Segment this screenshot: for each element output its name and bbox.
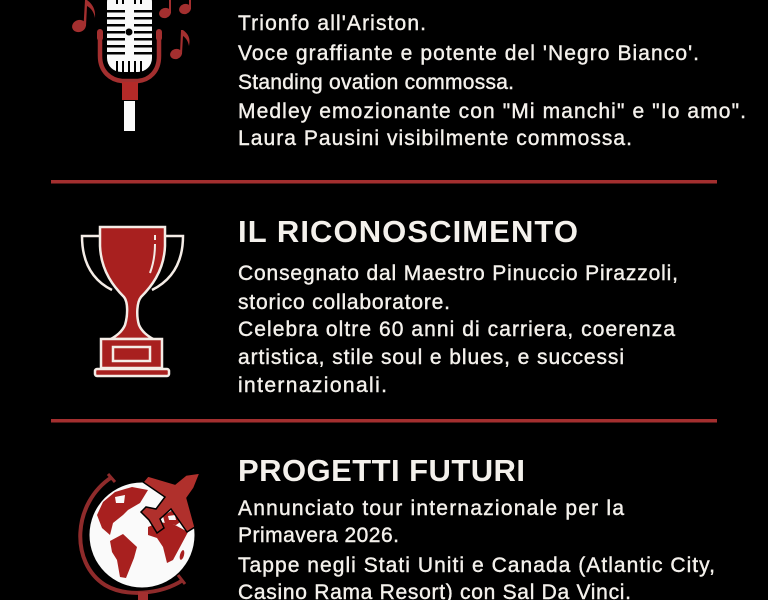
text block: progetti futuri: Annunciato tour internazionale per la: [238, 497, 624, 520]
text block: progetti futuri: [238, 497, 715, 600]
text block: progetti futuri: Primavera 2026.: [238, 524, 399, 547]
text block: performance: Voce graffiante e potente del 'Negro Bianco'.: [238, 42, 699, 65]
text block: riconoscimento: Consegnato dal Maestro Pinuccio Pirazzoli,: [238, 262, 678, 285]
text block: performance: [238, 12, 746, 150]
text block: riconoscimento: [238, 262, 678, 397]
divider 2: [51, 419, 717, 422]
text block: riconoscimento: internazionali.: [238, 374, 387, 397]
text block: progetti futuri: Tappe negli Stati Uniti e Canada (Atlantic City,: [238, 554, 715, 577]
text block: riconoscimento: artistica, stile soul e blues, e successi: [238, 346, 624, 369]
text block: performance: Laura Pausini visibilmente commossa.: [238, 127, 632, 150]
icon: airplane: [141, 473, 200, 533]
divider 1: [51, 180, 717, 184]
text block: performance: Medley emozionante con "Mi manchi" e "Io amo".: [238, 100, 746, 123]
text block: performance: Trionfo all'Ariston.: [238, 12, 426, 35]
heading: il riconoscimento: IL RICONOSCIMENTO: [238, 214, 578, 249]
text block: performance: Standing ovation commossa.: [238, 71, 514, 94]
icon: globe with airplane: [80, 473, 200, 600]
icon: microphone with music notes: [70, 0, 192, 131]
text block: riconoscimento: Celebra oltre 60 anni di carriera, coerenza: [238, 318, 675, 341]
icon: trophy: [82, 227, 183, 376]
text block: riconoscimento: storico collaboratore.: [238, 291, 450, 314]
heading: progetti futuri: PROGETTI FUTURI: [238, 453, 525, 488]
